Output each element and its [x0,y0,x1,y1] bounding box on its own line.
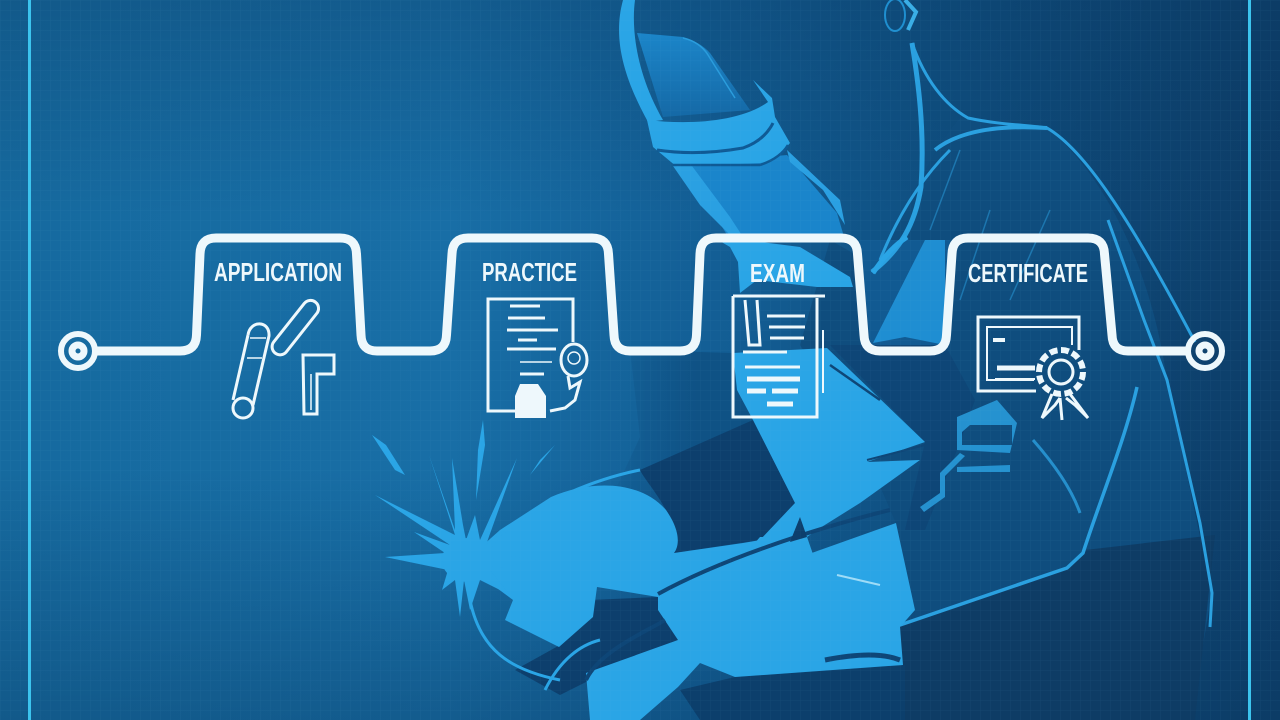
frame: right line [1248,0,1251,720]
label: application: APPLICATION [214,257,342,287]
head detail [885,0,916,31]
label: certificate: CERTIFICATE [968,258,1088,288]
icon: exam paper [733,296,825,417]
welder figure illustration [372,0,1215,720]
icon: document with seal [488,299,587,411]
step 3: exam [733,258,825,417]
start node [61,334,95,368]
process path [96,238,1190,351]
neck and shoulder lines [872,43,1212,627]
mid blue panel behind certificate step [873,237,945,345]
upper arm [619,0,845,240]
step 1: application [214,257,342,418]
label: practice: PRACTICE [482,257,577,287]
step 4: certificate [968,258,1088,420]
end node [1188,334,1222,368]
frame: left line [28,0,31,720]
welding spark [372,420,555,617]
icon: stamp [515,384,546,418]
step 2: practice [482,257,587,418]
light blue sleeve and glove [463,486,915,720]
label: exam: EXAM [750,258,805,288]
icon: certificate with rosette [978,317,1088,420]
central light panels [718,240,925,540]
icon: welding tools [233,297,334,418]
cuff folds [920,400,1017,512]
dark notch in sleeve [790,517,807,542]
torso shading [515,118,1215,720]
sleeve seam lines [470,365,925,690]
